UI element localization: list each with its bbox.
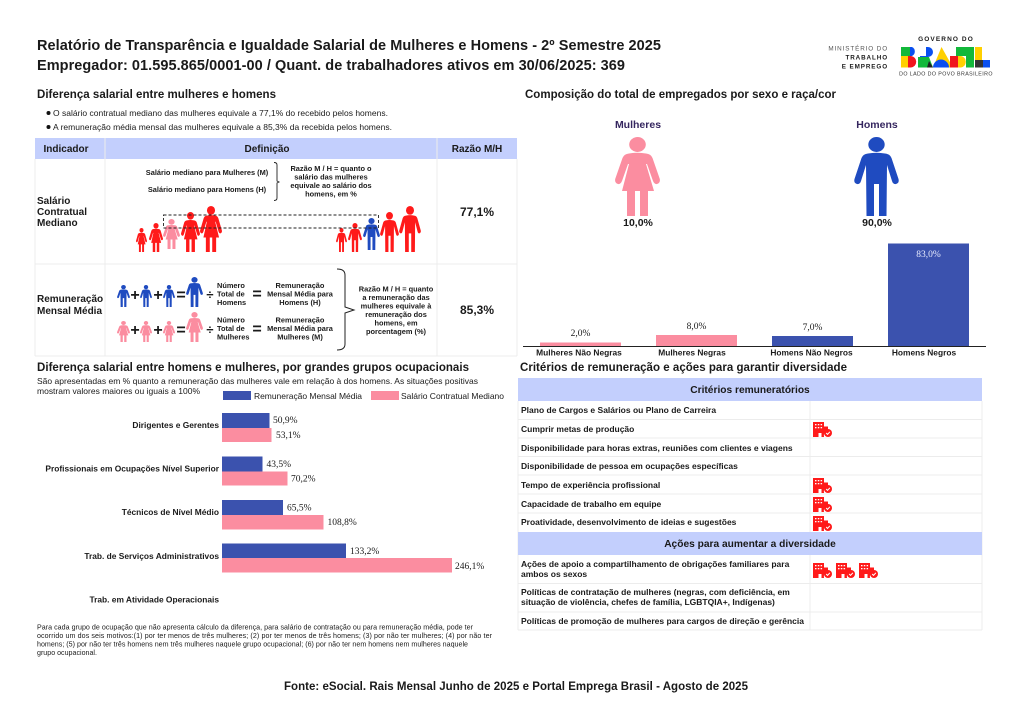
row: salário contratual mediano: Razão M / H = quanto o xyxy=(290,164,372,173)
formula: men: + xyxy=(153,287,163,304)
row: salário contratual mediano: Mediano xyxy=(37,218,78,229)
footnote: Para cada grupo de ocupação que não apresenta cálculo da diferença, para salário de contratação ou para remuneração média, pode ter xyxy=(37,624,474,632)
formula: men: Homens xyxy=(217,298,246,307)
logo: Ministério do Trabalho e Emprego xyxy=(828,44,888,70)
row: salário contratual mediano: salário das mulheres xyxy=(294,172,368,182)
table header: Razão M/H xyxy=(452,144,502,155)
heading: grupos ocupacionais: Diferença salarial entre homens e mulheres, por grandes grupos ocupacionais xyxy=(37,362,469,374)
formula: women: = xyxy=(176,322,186,339)
action rows: Ações de apoio a compartilhamento de obrigações familiares para xyxy=(521,559,790,569)
formula: men: Número xyxy=(217,281,245,290)
panel: men share: 90,0% xyxy=(862,217,893,229)
panel: men share xyxy=(854,119,899,229)
bullets: diferença salarial xyxy=(46,108,392,132)
heading: diferença salarial: Diferença salarial entre mulheres e homens xyxy=(37,89,276,101)
section header: ações xyxy=(518,532,982,555)
formula: men: = xyxy=(252,286,262,303)
row: remuneração mensal média xyxy=(37,294,494,317)
row: salário contratual mediano: homens, em % xyxy=(305,190,357,198)
group: profissionais: 43,5% xyxy=(266,460,291,470)
brace and ratio explanation: a remuneração das xyxy=(362,293,430,302)
section header: critérios remuneratórios xyxy=(518,378,982,401)
row: remuneração mensal média: Remuneração xyxy=(37,294,103,305)
bar chart: composition by sex and race: 2,0% xyxy=(571,329,590,339)
bar chart: composition by sex and race: 7,0% xyxy=(803,323,822,333)
description: grupos ocupacionais: São apresentadas em % quanto a remuneração das mulheres vale em relação à dos homens. As situações positivas xyxy=(37,376,478,386)
logo: Governo do Brasil xyxy=(899,36,993,78)
formula: women: Mulheres xyxy=(217,332,249,342)
title: Empregador: 01.595.865/0001-00 / Quant. de trabalhadores ativos em 30/06/2025: 369 xyxy=(37,58,625,74)
group: dirigentes e gerentes: Dirigentes e Gerentes xyxy=(132,420,219,430)
row: salário contratual mediano xyxy=(37,162,494,229)
formula: women: Total de xyxy=(217,324,245,333)
panel: criteria table xyxy=(518,378,982,630)
row: remuneração mensal média: 85,3% xyxy=(460,303,494,317)
brace and ratio explanation: remuneração dos xyxy=(365,310,427,319)
brace and ratio explanation: homens, em xyxy=(374,318,418,328)
row: salário contratual mediano: equivale ao salário dos xyxy=(290,181,372,190)
description: grupos ocupacionais: mostram valores maiores ou iguais a 100% xyxy=(37,386,200,396)
formula: men: = xyxy=(176,287,186,304)
footnote: grupo ocupacional. xyxy=(37,649,97,657)
group: profissionais: Profissionais em Ocupações Nível Superior xyxy=(45,464,220,474)
dashed median connector xyxy=(164,215,378,228)
source line: Fonte: eSocial. Rais Mensal Junho de 2025 e Portal Emprega Brasil - Agosto de 2025 xyxy=(284,681,749,693)
panel: men share: Homens xyxy=(856,119,898,131)
bar chart: occupational groups xyxy=(45,413,484,604)
action rows: ambos os sexos xyxy=(521,569,587,579)
row: remuneração mensal média: Mensal Média xyxy=(37,306,102,317)
criteria rows: Plano de Cargos e Salários ou Plano de Carreira xyxy=(521,405,716,415)
formula: men: + xyxy=(130,287,140,304)
formula: women xyxy=(117,312,334,342)
bar chart: composition by sex and race: Mulheres Negras xyxy=(658,348,726,358)
group: profissionais: 70,2% xyxy=(291,474,316,484)
formula: men xyxy=(117,277,334,307)
row: salário contratual mediano: Salário mediano para Mulheres (M) xyxy=(146,168,269,177)
icons: company check marks for actions xyxy=(813,563,878,578)
group: técnicos xyxy=(122,500,357,530)
group: dirigentes e gerentes: 50,9% xyxy=(273,416,298,426)
group: serviços administrativos: Trab. de Serviços Administrativos xyxy=(84,551,219,561)
brace and ratio explanation xyxy=(337,269,434,350)
formula: women: Mensal Média para xyxy=(267,324,334,333)
legend: Remuneração Mensal Média xyxy=(254,391,362,401)
row: salário contratual mediano: Salário mediano para Homens (H) xyxy=(148,185,267,194)
row: salário contratual mediano: 77,1% xyxy=(460,205,494,219)
formula: women: + xyxy=(153,322,163,339)
logo: Ministério do Trabalho e Emprego: E EMPREGO xyxy=(842,64,888,70)
title xyxy=(37,38,661,74)
legend: Salário Contratual Mediano xyxy=(401,391,504,401)
criteria rows xyxy=(521,405,793,527)
criteria rows: Tempo de experiência profissional xyxy=(521,480,660,490)
formula: women: Remuneração xyxy=(276,316,325,324)
bar chart: composition by sex and race: Homens Não Negros xyxy=(770,348,853,358)
legend xyxy=(223,391,504,401)
group: serviços administrativos: 246,1% xyxy=(455,562,484,572)
heading: critérios: Critérios de remuneração e ações para garantir diversidade xyxy=(520,362,847,374)
action rows: Políticas de promoção de mulheres para cargos de direção e gerência xyxy=(521,616,804,626)
title: Relatório de Transparência e Igualdade Salarial de Mulheres e Homens - 2º Semestre 2025 xyxy=(37,38,661,54)
panel: women share: Mulheres xyxy=(615,119,661,131)
footnote xyxy=(37,624,493,657)
bullets: diferença salarial: A remuneração média mensal das mulheres equivale a 85,3% da recebida pelos homens. xyxy=(53,122,392,132)
bar chart: composition by sex and race: 8,0% xyxy=(687,322,706,332)
brace and ratio explanation: Razão M / H = quanto xyxy=(359,284,434,294)
description: grupos ocupacionais xyxy=(37,376,478,396)
action rows: Políticas de contratação de mulheres (negras, com deficiência, em xyxy=(521,587,790,597)
formula: women: Número xyxy=(217,316,245,324)
table header: Definição xyxy=(244,144,290,155)
logo: Governo do Brasil: GOVERNO DO xyxy=(918,36,974,43)
panel: indicator table xyxy=(35,138,517,356)
criteria rows: Cumprir metas de produção xyxy=(521,424,634,434)
footnote: ocorrido um dos seis motivos:(1) por ter menos de três mulheres; (2) por ter menos de três homens; (3) por não ter mulheres; (4) por não ter xyxy=(37,632,493,640)
table header xyxy=(35,138,517,159)
logo: Ministério do Trabalho e Emprego: MINISTÉRIO DO xyxy=(828,44,888,52)
brace and ratio explanation: mulheres equivale à xyxy=(361,302,432,310)
table header: Indicador xyxy=(43,144,89,155)
row: salário contratual mediano: Salário xyxy=(37,196,70,207)
group: técnicos: Técnicos de Nível Médio xyxy=(122,507,219,517)
formula: women: = xyxy=(252,321,262,338)
section header: ações: Ações para aumentar a diversidade xyxy=(664,539,836,550)
criteria rows: Disponibilidade de pessoa em ocupações específicas xyxy=(521,461,738,471)
group: dirigentes e gerentes xyxy=(132,413,301,442)
formula: men: Mensal Média para xyxy=(267,290,334,298)
bullets: diferença salarial: O salário contratual mediano das mulheres equivale a 77,1% do recebido pelos homens. xyxy=(53,108,388,118)
logo: Governo do Brasil: DO LADO DO POVO BRASILEIRO xyxy=(899,72,993,78)
group: serviços administrativos xyxy=(84,544,484,572)
group: técnicos: 65,5% xyxy=(287,504,312,514)
group: dirigentes e gerentes: 53,1% xyxy=(276,431,301,441)
formula: men: Remuneração xyxy=(276,281,325,290)
figures: salary ranking of men xyxy=(336,206,421,252)
formula: men: Total de xyxy=(217,290,245,298)
group: técnicos: 108,8% xyxy=(328,518,357,528)
criteria rows: Proatividade, desenvolvimento de ideias e sugestões xyxy=(521,517,737,527)
criteria rows: Capacidade de trabalho em equipe xyxy=(521,499,662,509)
bar chart: composition by sex and race: 83,0% xyxy=(916,250,941,260)
action rows xyxy=(521,559,804,626)
figures: salary ranking of women xyxy=(136,206,222,252)
icons: company check marks for criteria xyxy=(813,422,832,531)
panel: women share xyxy=(615,119,661,229)
section header: critérios remuneratórios: Critérios remuneratórios xyxy=(690,385,810,396)
group: atividade operacional: Trab. em Atividade Operacionais xyxy=(89,594,219,604)
panel: women share: 10,0% xyxy=(623,217,654,229)
heading: composição: Composição do total de empregados por sexo e raça/cor xyxy=(525,89,837,101)
formula: women: Mulheres (M) xyxy=(277,332,323,342)
bar chart: composition by sex and race: Homens Negros xyxy=(892,348,956,358)
bar chart: composition by sex and race: Mulheres Não Negras xyxy=(536,348,622,358)
formula: men: Homens (H) xyxy=(279,298,321,307)
footnote: homens; (5) por não ter três homens nem três mulheres naquele grupo ocupacional; (6) por não ter nem homens nem mulheres naquele xyxy=(37,640,468,648)
group: serviços administrativos: 133,2% xyxy=(350,547,379,557)
group: profissionais xyxy=(45,456,316,486)
formula: women: ÷ xyxy=(206,322,214,337)
brace and ratio explanation: porcentagem (%) xyxy=(366,327,427,336)
criteria rows: Disponibilidade para horas extras, reuniões com clientes e viagens xyxy=(521,443,793,453)
bar chart: composition by sex and race xyxy=(523,244,986,358)
formula: women: + xyxy=(130,322,140,339)
row: salário contratual mediano: Contratual xyxy=(37,207,87,218)
action rows: situação de violência, chefes de família, LGBTQIA+, Indígenas) xyxy=(521,597,775,607)
logo: Ministério do Trabalho e Emprego: TRABALHO xyxy=(845,54,888,62)
formula: men: ÷ xyxy=(206,287,214,302)
